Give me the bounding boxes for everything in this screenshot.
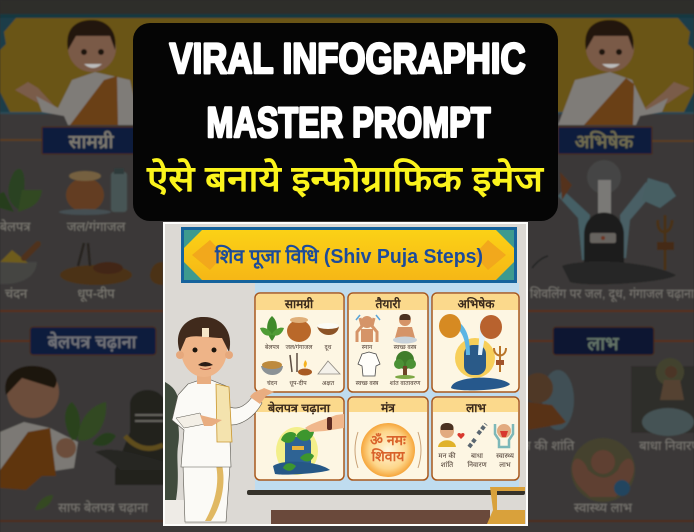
samagri labels row one: बेलपत्र <box>0 219 31 234</box>
panel: बेलपत्र चढ़ाना <box>255 397 344 480</box>
panel: लाभ: लाभ <box>465 401 486 415</box>
character: right presenter <box>558 20 690 125</box>
panel: लाभ <box>432 397 519 480</box>
section label: लाभ: लाभ <box>586 334 619 355</box>
panel: लाभ: स्वास्थ्य <box>496 453 515 460</box>
section label: लाभ <box>528 310 694 355</box>
poster board backing <box>255 283 519 490</box>
panel: लाभ: लाभ <box>499 462 512 469</box>
panel: सामग्री: दूध <box>325 345 332 351</box>
samagri labels row one <box>0 219 125 234</box>
benefit: peace of mind <box>516 370 575 453</box>
panel: अभिषेक: अभिषेक <box>458 297 495 311</box>
section label: बेलपत्र चढ़ाना: बेलपत्र चढ़ाना <box>47 331 138 352</box>
benefit: obstacle removal photo <box>631 358 694 453</box>
section label: अभिषेक: अभिषेक <box>575 130 635 153</box>
plant <box>165 382 179 500</box>
samagri items: leaf, pot, bottle <box>0 168 127 215</box>
poster banner <box>181 227 517 283</box>
presenter man <box>172 317 274 522</box>
panel: मंत्र: शिवाय <box>371 448 405 464</box>
panel: लाभ: मन की <box>438 451 456 460</box>
panel: अभिषेक <box>432 293 519 392</box>
poster banner: शिव पूजा विधि (Shiv Puja Steps) <box>214 244 483 269</box>
panel: सामग्री <box>255 293 344 392</box>
panel: मंत्र: ॐ नमः <box>370 432 407 448</box>
shivling with garland, left <box>95 390 165 485</box>
panel: लाभ: निवारण <box>467 460 488 469</box>
title line one: VIRAL INFOGRAPHIC <box>170 35 526 83</box>
benefit: health: स्वास्थ्य लाभ <box>574 500 633 515</box>
character: left presenter <box>15 20 140 125</box>
boy offering leaves <box>0 366 116 490</box>
benefit: health <box>571 438 635 515</box>
samagri labels row two: धूप-दीप <box>77 286 115 302</box>
poster image <box>163 222 528 526</box>
abhishek illustration <box>532 160 676 284</box>
panel: तैयारी <box>348 293 428 392</box>
panel: मंत्र: मंत्र <box>380 401 396 415</box>
section label: सामग्री <box>0 127 138 154</box>
panel: बेलपत्र चढ़ाना: बेलपत्र चढ़ाना <box>267 401 331 415</box>
samagri labels row two <box>5 286 115 302</box>
panel: तैयारी: स्नान <box>362 345 373 351</box>
panel: तैयारी: स्वच्छ वस्त्र <box>394 345 417 351</box>
panel: मंत्र <box>348 397 428 480</box>
panel: सामग्री: सामग्री <box>284 297 314 311</box>
panel: लाभ: शांति <box>441 460 454 469</box>
panel: तैयारी: स्वच्छ वस्त्र <box>356 381 379 387</box>
panel: सामग्री: बेलपत्र <box>265 343 280 351</box>
samagri items: chandan and dhoop <box>0 243 163 285</box>
benefit: peace of mind: मन की शांति <box>516 438 575 453</box>
section label: सामग्री: सामग्री <box>68 130 114 153</box>
title line two: MASTER PROMPT <box>206 99 490 147</box>
panel: सामग्री: जल/गंगाजल <box>285 344 313 351</box>
panel: सामग्री: चंदन <box>267 380 278 387</box>
panel: सामग्री: अक्षत <box>322 381 335 387</box>
panel: तैयारी: शांत वातावरण <box>390 380 421 387</box>
panel: सामग्री: धूप-दीप <box>289 379 307 387</box>
samagri labels row two: चंदन <box>5 286 28 301</box>
wall base and table <box>165 487 525 524</box>
panel: लाभ: बाधा <box>471 453 483 460</box>
section label: बेलपत्र चढ़ाना <box>0 310 163 355</box>
title card <box>133 23 558 221</box>
section label: अभिषेक <box>558 127 694 154</box>
panel: तैयारी: तैयारी <box>375 297 401 311</box>
caption: clean bel leaf <box>35 495 148 515</box>
samagri labels row one: जल/गंगाजल <box>67 219 125 234</box>
hindi subtitle: ऐसे बनाये इन्फोग्राफिक इमेज <box>146 158 544 199</box>
caption: clean bel leaf: साफ बेलपत्र चढ़ाना <box>58 500 148 515</box>
